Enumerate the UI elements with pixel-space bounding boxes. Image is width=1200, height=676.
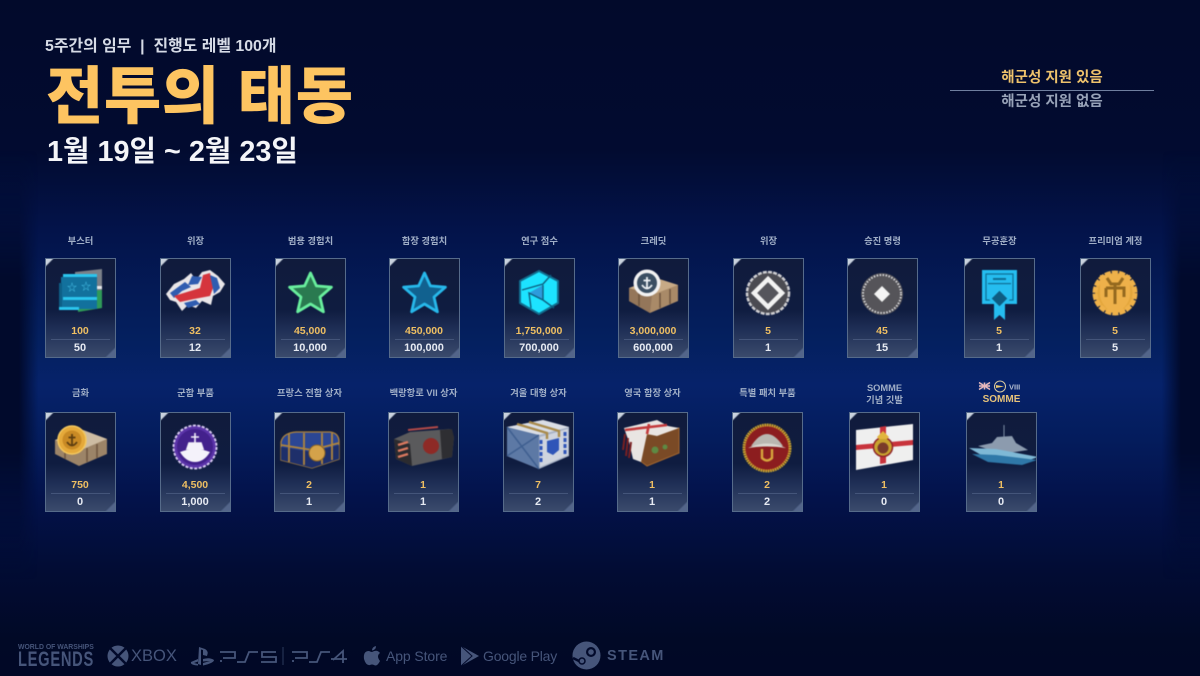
legend divider [950,90,1154,91]
reward: French battleship crate: 1 [306,496,312,508]
ship tier line: UK flag, destroyer class, VIII [978,380,1020,392]
reward: warship parts: 1,000 [181,496,209,508]
reward: UK ship crate [617,388,688,512]
reward: camouflage badge [733,236,804,358]
reward: Somme ship: 1 [998,479,1004,491]
reward: warship parts: 4,500 [182,479,208,491]
reward: commander xp blue star [389,236,460,358]
text: 프리미엄 계정 [1089,236,1142,246]
reward: Somme ship: 0 [998,496,1004,508]
reward: premium account [1080,236,1151,358]
logo: World of Warships Legends: WORLD OF WARSHIPS [18,644,94,651]
reward: commander xp green star: 10,000 [293,342,327,354]
text: 함장 경험치 [402,236,447,246]
logo: Steam [572,642,665,670]
logo: App Store [364,646,447,666]
reward: commander xp green star: 45,000 [294,325,326,337]
reward: doubloons: 750 [71,479,89,491]
reward: UK ship crate: 1 [649,479,655,491]
reward: premium account: 5 [1112,325,1118,337]
reward: UK ship crate: 1 [649,496,655,508]
reward: camouflage badge: 5 [765,325,771,337]
logo: Steam: STEAM [607,648,665,664]
reward: commander xp blue star: 100,000 [404,342,444,354]
reward: credits: 3,000,000 [630,325,676,337]
text: 프랑스 전함 상자 [277,388,342,398]
reward: camouflage badge: 1 [765,342,771,354]
ship tier line: UK flag, destroyer class, VIII: VIII [1009,382,1020,392]
reward: Baekrang VII crate: 1 [420,496,426,508]
reward: doubloons: 0 [77,496,83,508]
logo: Google Play: Google Play [483,648,557,664]
reward: booster: 100 [71,325,89,337]
reward: merit medal: 5 [996,325,1002,337]
text: 위장 [760,236,777,246]
reward: camouflage: 12 [189,342,201,354]
legend [950,69,1154,110]
reward: winter large crate: 2 [535,496,541,508]
reward: promotion orders: 15 [876,342,888,354]
subtitle: 5주간의 임무 | 진행도 레벨 100개 [45,38,277,55]
reward: camouflage [160,236,231,358]
logo: World of Warships Legends: LEGENDS [18,648,94,671]
reward: Baekrang VII crate: 1 [420,479,426,491]
text: 금화 [72,388,89,398]
reward: winter large crate: 7 [535,479,541,491]
reward: premium account: 5 [1112,342,1118,354]
text: 겨울 대형 상자 [510,388,567,398]
reward: promotion orders: 45 [876,325,888,337]
logo: App Store: App Store [386,648,447,664]
text: 영국 함장 상자 [624,388,681,398]
reward: credits: 600,000 [633,342,673,354]
text: 군함 부품 [177,388,214,398]
reward: Somme commemorative flag [849,383,920,512]
logo: PS5 and PS4 [190,647,347,666]
reward: camouflage: 32 [189,325,201,337]
reward: commander xp blue star: 450,000 [405,325,443,337]
text: 크레딧 [641,236,666,246]
reward: Somme commemorative flag: 1 [881,479,887,491]
text: 특별 패치 부품 [739,388,796,398]
reward: merit medal [964,236,1035,358]
reward: French battleship crate [274,388,345,512]
reward: research points: 700,000 [519,342,559,354]
reward: Baekrang VII crate [388,388,459,512]
text: SOMME [983,394,1020,405]
logo: Xbox: XBOX [131,647,177,665]
text: 무공훈장 [982,236,1017,246]
text: 연구 점수 [521,236,558,246]
text: SOMME [867,383,902,393]
legend: with admiralty support: 해군성 지원 있음 [1001,70,1103,86]
reward: winter large crate [503,388,574,512]
reward: booster: ☆ [80,280,90,292]
legend: without admiralty support: 해군성 지원 없음 [1001,94,1103,110]
reward: doubloons [45,388,116,512]
reward: credits [618,236,689,358]
text: 부스터 [68,236,93,246]
reward: merit medal: 1 [996,342,1002,354]
text: 백랑항로 VII 상자 [390,388,457,398]
footer platform logos [18,642,665,671]
text: 범용 경험치 [288,236,333,246]
title: 전투의 태동 [46,46,353,136]
reward: warship parts [160,388,231,512]
reward: special match parts: 2 [764,496,770,508]
logo: Google Play [461,646,558,666]
reward: research points: 1,750,000 [516,325,562,337]
text: 위장 [187,236,204,246]
reward: promotion orders [847,236,918,358]
reward: special match parts: 2 [764,479,770,491]
text: 승진 명령 [864,236,901,246]
reward: research points [504,236,575,358]
reward: booster: 50 [74,342,86,354]
reward: booster: ☆ [66,282,76,294]
reward: French battleship crate: 2 [306,479,312,491]
logo: Xbox [108,646,177,666]
date range: 1월 19일 ~ 2월 23일 [47,136,298,168]
reward: Somme ship [966,380,1037,512]
reward: special match parts [732,388,803,512]
text: 기념 깃발 [866,395,903,405]
reward: booster [45,236,116,358]
reward: Somme commemorative flag: 0 [881,496,887,508]
reward: commander xp green star [275,236,346,358]
